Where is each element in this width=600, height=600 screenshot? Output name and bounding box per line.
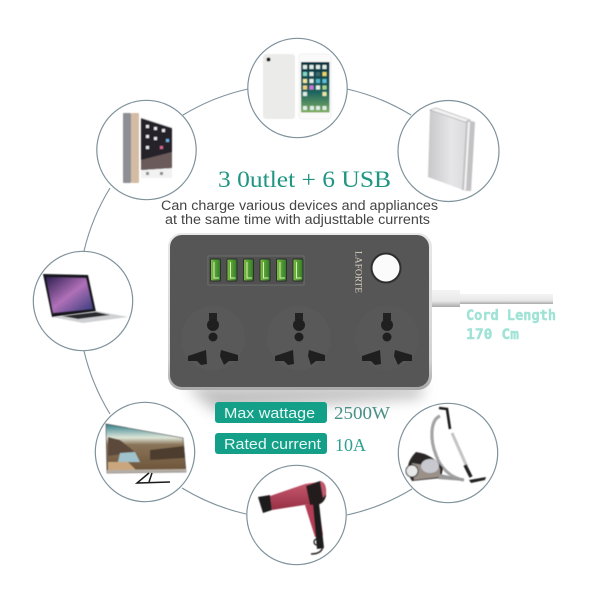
strip face	[170, 235, 429, 387]
laptop screen	[43, 274, 96, 317]
laptop base	[52, 311, 128, 323]
USB panel	[208, 256, 304, 285]
power bank body	[428, 108, 475, 191]
power button	[370, 252, 402, 284]
circle: vacuum cleaner	[398, 403, 498, 503]
phone back	[263, 54, 295, 119]
circle: phones	[248, 38, 347, 138]
cord length label: 170 Cm	[466, 327, 519, 343]
socket 2	[267, 306, 331, 370]
description text	[161, 198, 438, 227]
strip frame	[168, 233, 432, 390]
spec: rated current	[215, 433, 366, 455]
spec: max wattage: Max wattage	[224, 405, 315, 422]
brand logo: LAFORTE	[354, 251, 364, 294]
dryer	[258, 481, 326, 554]
monitor stand	[137, 473, 170, 483]
vacuum	[406, 408, 486, 483]
spec: max wattage: 2500W	[334, 403, 390, 423]
cord length label	[466, 308, 556, 343]
circle: hair dryer	[247, 465, 346, 565]
tablet screen	[141, 117, 172, 178]
spec: max wattage	[215, 402, 390, 423]
power cord	[432, 290, 553, 307]
description text: at the same time with adjusttable currents	[165, 212, 430, 227]
tablet edges	[123, 113, 139, 183]
monitor screen	[106, 424, 186, 473]
connecting arcs	[84, 89, 412, 515]
socket 3	[355, 306, 419, 370]
socket 1	[181, 306, 245, 370]
circle: monitor	[95, 402, 195, 502]
circle: power bank	[398, 100, 499, 202]
phone front	[299, 54, 331, 119]
circle: tablets	[97, 100, 196, 200]
title: 3 0utlet + 6 USB	[218, 167, 391, 192]
spec: rated current: Rated current	[224, 436, 322, 453]
circle: laptop	[33, 251, 133, 351]
description text: Can charge various devices and appliances	[161, 198, 438, 213]
cord length label: Cord Length	[466, 308, 556, 324]
power strip	[168, 233, 432, 412]
spec: rated current: 10A	[335, 435, 366, 455]
strip shadow	[185, 385, 425, 412]
